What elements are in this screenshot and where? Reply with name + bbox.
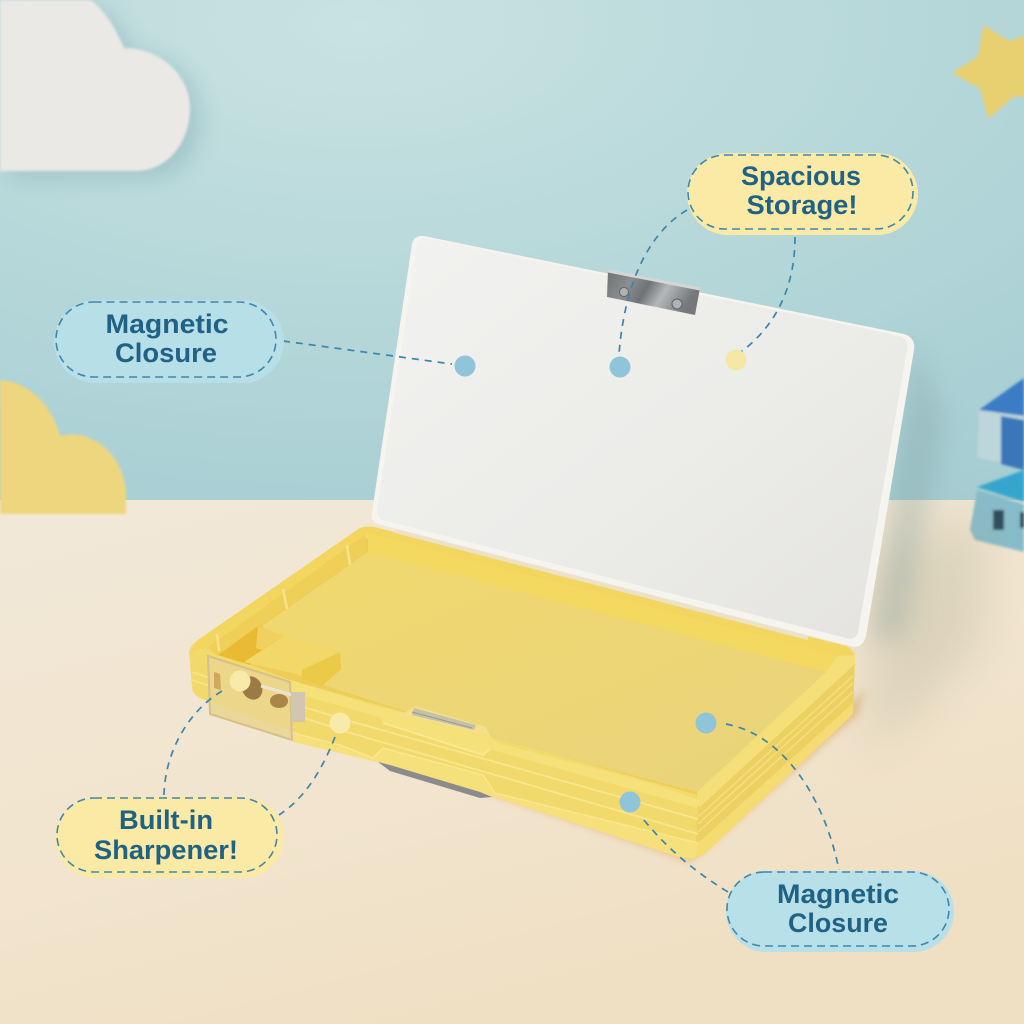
callout: magnetic closure (right): Closure <box>788 908 888 938</box>
decoration: yellow star <box>954 27 1024 117</box>
callout: magnetic closure (left) <box>54 300 284 383</box>
callout: built-in sharpener: Built-in <box>119 805 213 835</box>
clear sharpener cover <box>208 656 305 740</box>
back and left outer rim <box>190 526 855 656</box>
front lower lip <box>293 733 698 859</box>
front inner lip <box>290 680 700 808</box>
front wall <box>190 652 698 859</box>
sharpener compartment <box>218 626 341 686</box>
pencil case lid <box>372 236 914 647</box>
lid hinge strip <box>395 531 808 638</box>
decoration: blurred toy blocks <box>970 378 1024 552</box>
decoration: white cloud <box>0 0 200 178</box>
callout: magnetic closure (right) <box>726 871 954 952</box>
right side ribs <box>698 676 853 832</box>
rim inner ribs <box>217 545 350 651</box>
background wall <box>0 0 1024 505</box>
front ribs <box>300 706 698 819</box>
front rim tab <box>372 705 497 755</box>
decoration: yellow cloud <box>0 380 126 514</box>
interior walls <box>206 538 840 795</box>
callout: spacious storage: Storage! <box>746 190 858 220</box>
callout: spacious storage: Spacious <box>741 161 861 191</box>
callout: magnetic closure (left): Closure <box>115 338 217 368</box>
outer body <box>189 526 855 858</box>
callout: built-in sharpener: Sharpener! <box>94 835 238 865</box>
lid shadow on wall <box>870 340 945 640</box>
background floor <box>0 500 1024 1024</box>
callout: built-in sharpener <box>55 797 284 878</box>
leader lines <box>164 210 839 892</box>
left inner wall <box>207 534 367 656</box>
right side wall <box>695 655 855 858</box>
back inner wall <box>368 533 838 672</box>
callout: spacious storage <box>687 153 918 235</box>
right rim <box>697 655 855 808</box>
marker dots <box>230 350 746 812</box>
callout: magnetic closure (left): Magnetic <box>106 309 228 339</box>
bottom metal latch <box>378 762 492 798</box>
magnet plate <box>390 706 490 736</box>
lid clasp <box>607 270 700 315</box>
interior floor <box>262 552 826 792</box>
box shadow on floor <box>200 505 985 862</box>
callout: magnetic closure (right): Magnetic <box>777 879 899 909</box>
pencil case base <box>189 526 855 859</box>
